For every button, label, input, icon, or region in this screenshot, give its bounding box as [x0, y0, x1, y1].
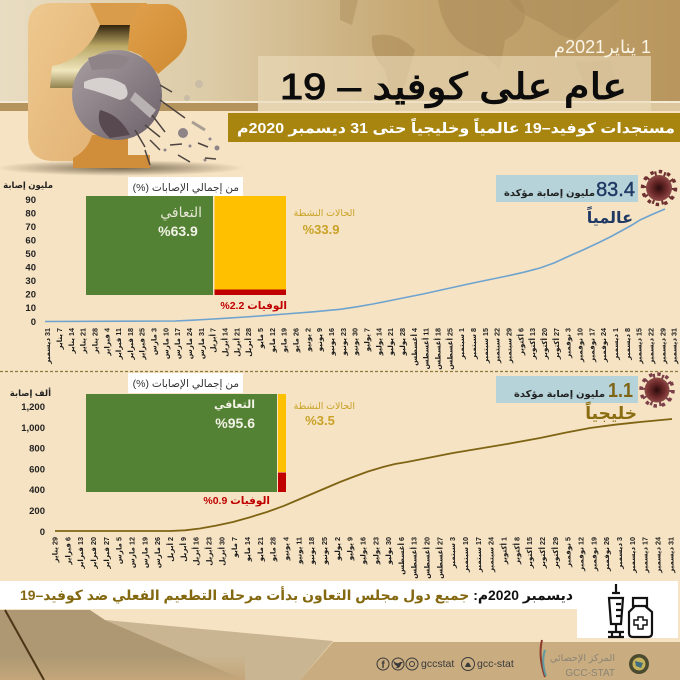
x axis dates: 17 مارس: [173, 328, 182, 359]
x axis dates: 4 أغسطس: [410, 328, 419, 366]
x axis dates: 29 أكتوبر: [551, 537, 560, 569]
x axis dates: 20 أكتوبر: [540, 328, 549, 360]
callout: global confirmed: [496, 175, 638, 202]
x axis dates: 28 أبريل: [244, 328, 253, 357]
y axis labels: 50: [25, 249, 36, 260]
x axis dates: 15 سبتمبر: [481, 328, 490, 364]
label: active cases: %33.9: [303, 222, 339, 237]
x axis dates: 7 مايو: [230, 537, 239, 558]
x axis dates: 9 يونيو: [315, 328, 324, 352]
x axis dates: 7 يوليو: [362, 328, 372, 352]
x axis dates: 6 أكتوبر: [516, 328, 525, 356]
x axis dates: 7 يناير: [55, 328, 64, 350]
x axis dates: 3 نوفمبر: [564, 328, 573, 359]
label: active cases: [294, 401, 355, 428]
x axis dates: 19 مارس: [140, 537, 149, 568]
y axis labels: 40: [25, 262, 36, 274]
y axis labels: [25, 195, 36, 328]
x axis dates: 6 أغسطس: [397, 537, 406, 575]
x axis dates: 24 سبتمبر: [487, 537, 496, 573]
y axis labels: 0: [40, 527, 45, 538]
social handles: gccstat: [421, 658, 454, 670]
y axis title: مليون إصابة: [3, 180, 53, 191]
y axis labels: 20: [25, 290, 36, 300]
treemap: deaths share: [214, 290, 286, 295]
y axis labels: 600: [29, 464, 45, 476]
x axis dates: 21 مايو: [256, 537, 265, 562]
x axis dates: 31 ديسمبر: [670, 328, 678, 365]
x axis dates: 5 مارس: [115, 537, 124, 564]
x axis dates: 14 يناير: [67, 328, 76, 354]
x axis dates: 9 يوليو: [346, 537, 355, 561]
y axis labels: 1,000: [21, 423, 45, 434]
x axis dates: 21 يناير: [79, 328, 88, 354]
line: GCC cases: [55, 419, 672, 531]
y axis labels: 400: [29, 485, 45, 496]
treemap: recovered share: التعافي: [214, 399, 255, 411]
x axis dates: 30 يونيو: [351, 328, 360, 356]
x axis dates: 28 يناير: [90, 328, 99, 354]
x axis dates: 14 أبريل: [221, 328, 230, 357]
x axis dates: 11 أغسطس: [422, 328, 431, 369]
treemap: active share: [214, 196, 286, 290]
label: GCC: خليجياً: [585, 400, 637, 423]
x axis dates: 30 أبريل: [217, 537, 226, 566]
treemap: recovered share: [86, 394, 277, 492]
date: 1 يناير2021م: [554, 37, 651, 58]
x axis dates: 11 يونيو: [294, 537, 303, 565]
y axis labels: 90: [25, 195, 36, 206]
social handles: f: [381, 660, 385, 671]
icon: syringe and vaccine bottle: [608, 584, 652, 637]
banner: vaccination note: [0, 581, 678, 638]
x axis dates: 12 نوفمبر: [576, 537, 586, 572]
x axis dates: 24 ديسمبر: [654, 537, 662, 574]
icon: wooden number with globe: [0, 3, 245, 176]
x axis dates: 3 مارس: [150, 328, 159, 355]
x axis dates: 10 نوفمبر: [576, 328, 584, 363]
footer polygons: [0, 610, 680, 680]
treemap: recovered share: %95.6: [215, 415, 255, 431]
treemap: recovered share: [86, 196, 213, 295]
label: deaths: الوفيات 2.2%: [220, 300, 287, 312]
x axis dates: 18 فبراير: [126, 328, 135, 361]
x axis dates: 27 فبراير: [102, 537, 111, 570]
y axis labels: [21, 402, 45, 538]
x axis dates: 3 ديسمبر: [615, 537, 624, 570]
x axis dates: 1 ديسمبر: [611, 328, 620, 361]
y axis labels: 30: [25, 276, 36, 287]
callout: GCC confirmed: [496, 376, 638, 403]
x axis dates: 10 سبتمبر: [461, 537, 470, 573]
social handles: [377, 658, 514, 671]
x axis dates: 31 ديسمبر: [666, 537, 675, 574]
y axis labels: 1,200: [21, 402, 45, 413]
label: global: عالمياً: [587, 205, 633, 227]
label: share of total: من إجمالي الإصابات (%): [133, 182, 239, 194]
x axis dates: 31 ديسمبر: [43, 328, 52, 365]
callout: global confirmed: 83.4: [596, 179, 635, 201]
x axis dates: 10 ديسمبر: [628, 537, 637, 574]
x axis dates: 14 مايو: [243, 537, 252, 562]
callout: global confirmed: مليون إصابة مؤكدة: [504, 188, 595, 199]
label: active cases: الحالات النشطة: [294, 208, 355, 219]
x axis dates: 12 مايو: [268, 328, 277, 353]
x axis dates: 18 أغسطس: [434, 328, 442, 370]
y axis labels: 70: [25, 222, 36, 233]
x axis dates: 16 يوليو: [358, 537, 367, 565]
x axis dates: 21 أبريل: [232, 328, 241, 357]
x axis dates: 16 يونيو: [327, 328, 336, 356]
icon: virus: [642, 172, 676, 204]
label: share of total: [128, 373, 243, 393]
x axis dates: 7 أبريل: [209, 328, 218, 353]
x axis dates: 30 يوليو: [384, 537, 393, 565]
x axis dates: 5 مايو: [256, 328, 265, 349]
title panel: [258, 56, 651, 111]
x axis dates: 20 أغسطس: [423, 537, 432, 579]
x axis dates: 2 يونيو: [303, 328, 312, 352]
x axis dates: 8 ديسمبر: [623, 328, 632, 361]
x axis dates: 25 أغسطس: [445, 328, 454, 370]
x axis dates: 22 ديسمبر: [646, 328, 655, 365]
x axis dates: 22 أكتوبر: [538, 537, 547, 569]
x axis dates: 24 نوفمبر: [599, 328, 608, 363]
x axis dates: 1 سبتمبر: [457, 328, 466, 360]
title: عام على كوفيد – 19: [280, 66, 627, 108]
x axis dates: 1 أكتوبر: [500, 537, 509, 565]
x axis dates: 13 فبراير: [76, 537, 85, 570]
label: share of total: من إجمالي الإصابات (%): [133, 378, 239, 390]
label: share of total: [128, 177, 243, 196]
x axis dates: 3 سبتمبر: [448, 537, 457, 569]
x axis dates: 22 سبتمبر: [493, 328, 502, 364]
x axis dates: 23 أبريل: [204, 537, 214, 566]
x axis dates: 15 ديسمبر: [635, 328, 644, 365]
x axis dates: 23 يونيو: [339, 328, 348, 356]
label: active cases: [294, 208, 355, 237]
y axis labels: 10: [25, 303, 36, 314]
x axis dates: 23 يوليو: [371, 537, 380, 565]
x axis dates: 25 فبراير: [138, 328, 147, 361]
x axis dates: 26 مايو: [292, 328, 300, 353]
x axis dates: 25 يونيو: [320, 537, 329, 565]
header background with world map: [0, 0, 680, 111]
x axis dates: 11 فبراير: [114, 328, 123, 360]
x axis dates: 28 يوليو: [398, 328, 407, 356]
x axis dates: [50, 537, 675, 579]
x axis dates: 27 أغسطس: [435, 537, 444, 579]
x axis dates: 10 مارس: [161, 328, 170, 359]
x axis dates: 17 سبتمبر: [474, 537, 483, 573]
x axis dates: 18 يونيو: [307, 537, 316, 565]
GCC-STAT logo: [541, 640, 615, 679]
x axis dates: 2 أبريل: [166, 537, 175, 562]
x axis dates: 26 مارس: [153, 537, 162, 568]
x axis dates: 17 ديسمبر: [641, 537, 650, 574]
x axis dates: 14 يوليو: [374, 328, 383, 356]
x axis dates: 29 سبتمبر: [504, 328, 514, 364]
x axis dates: 29 ديسمبر: [658, 328, 667, 365]
treemap: recovered share: %63.9: [158, 223, 198, 239]
panel: global chart: [3, 172, 678, 370]
x axis dates: 19 نوفمبر: [589, 537, 598, 572]
x axis dates: 16 أبريل: [192, 537, 201, 566]
x axis dates: 21 يوليو: [386, 328, 395, 356]
y axis labels: 0: [31, 317, 36, 328]
callout: GCC confirmed: مليون إصابة مؤكدة: [514, 389, 605, 400]
x axis dates: 29 يناير: [50, 537, 60, 564]
x axis dates: 31 مارس: [197, 328, 206, 359]
x axis dates: 27 أكتوبر: [552, 328, 561, 360]
y axis labels: 60: [25, 236, 36, 246]
x axis dates: 6 فبراير: [63, 537, 72, 566]
label: active cases: الحالات النشطة: [294, 401, 355, 412]
callout: GCC confirmed: 1.1: [608, 380, 633, 402]
x axis dates: 19 مايو: [280, 328, 289, 353]
x axis dates: 15 أكتوبر: [525, 537, 534, 569]
x axis dates: 12 مارس: [128, 537, 136, 568]
treemap: deaths share: [278, 472, 286, 492]
GCC-STAT logo: المركز الإحصائي: [550, 653, 615, 664]
GCC-STAT logo: GCC-STAT: [565, 668, 615, 679]
y axis labels: 200: [29, 506, 45, 517]
divider: [0, 370, 680, 372]
panel: GCC chart: [10, 373, 675, 579]
line: global cases: [45, 209, 665, 322]
treemap: active share: [278, 394, 286, 472]
subtitle text: مستجدات كوفيد–19 عالمياً وخليجياً حتى 31 ديسمبر 2020م: [237, 118, 675, 137]
x axis dates: 8 أكتوبر: [512, 537, 521, 565]
x axis dates: 20 فبراير: [89, 537, 98, 570]
x axis dates: 24 مارس: [185, 328, 194, 359]
x axis dates: 2 يوليو: [333, 537, 342, 561]
x axis dates: 5 نوفمبر: [564, 537, 573, 568]
x axis dates: 4 فبراير: [102, 328, 111, 357]
x axis dates: 26 نوفمبر: [602, 537, 611, 572]
x axis dates: 9 أبريل: [179, 537, 188, 562]
x axis dates: [43, 328, 679, 370]
label: active cases: %3.5: [305, 413, 335, 428]
x axis dates: 17 نوفمبر: [587, 328, 596, 363]
icon: virus: [641, 374, 673, 406]
social handles: gcc-stat: [477, 658, 514, 670]
label: deaths: الوفيات 0.9%: [203, 495, 270, 507]
x axis dates: 13 أكتوبر: [528, 328, 537, 360]
x axis dates: 13 أغسطس: [410, 537, 419, 579]
GCC emblem: [629, 654, 649, 674]
x axis dates: 4 يونيو: [281, 537, 290, 561]
x axis dates: 8 سبتمبر: [469, 328, 478, 360]
y axis labels: 80: [25, 208, 36, 220]
x axis dates: 28 مايو: [269, 537, 278, 562]
y axis title: ألف إصابة: [10, 387, 51, 398]
treemap: recovered share: التعافي: [160, 204, 202, 221]
banner text: ديسمبر 2020م: جميع دول مجلس التعاون بدأت مرحلة التطعيم الفعلي ضد كوفيد–19: [20, 586, 573, 604]
y axis labels: 800: [29, 444, 45, 454]
subtitle bar: [228, 113, 680, 142]
